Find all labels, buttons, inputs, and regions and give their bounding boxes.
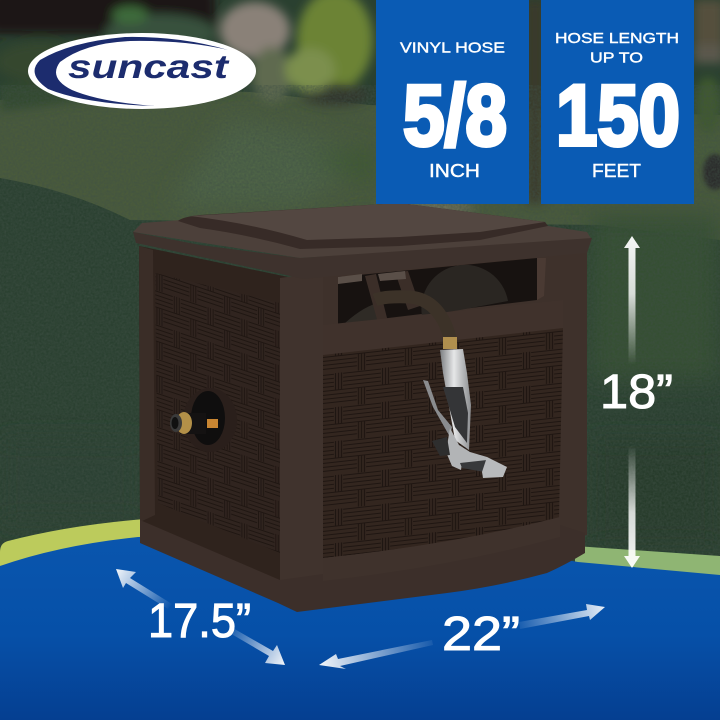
lid raised plate top [190,203,545,240]
number: 5/8: 5/8 [403,68,507,164]
side water fitting [170,388,237,452]
head [482,457,507,478]
lever [446,428,487,470]
arrow: height down [624,445,640,568]
label: hose length: HOSE LENGTH [555,30,679,47]
arrow: height up [624,236,640,365]
lower dark grip [460,460,487,472]
dimension: height 18 inches: 18” [600,366,673,419]
dimension: width 22 inches: 22” [442,608,520,661]
product: hose reel box [133,203,592,612]
arrow: width right [519,604,605,629]
lid rim [133,203,592,258]
logo wordmark: suncast [68,48,231,85]
knob [432,437,450,456]
blue floor [0,530,720,720]
logo: suncast [28,33,256,109]
silver barrel [440,349,471,450]
hose [375,297,450,338]
upper bright lawn [0,88,720,240]
dimension: depth 17.5 inches: 17.5” [148,595,251,648]
front wicker panel [323,328,563,558]
box left corner strip [139,246,155,522]
lid raised plate edge [178,203,548,249]
spray nozzle [423,337,507,478]
logo swoosh [35,37,228,106]
label: up to: UP TO [590,50,643,66]
dark grip [443,387,468,443]
unit: inch: INCH [429,161,480,181]
grass grain [0,85,720,565]
label: vinyl hose: VINYL HOSE [400,40,505,56]
lid front edge [133,232,592,279]
number: 150: 150 [556,68,680,164]
arrow: width left [319,640,433,669]
trigger [423,380,452,437]
lower front trim [323,517,560,581]
front body [322,246,587,585]
reel window opening [338,258,546,324]
brass collar [443,337,457,349]
front pillar [280,272,323,586]
arrow: depth down-right [228,627,285,665]
panel: hose length [541,0,694,204]
unit: feet: FEET [592,161,641,181]
front band [323,300,563,355]
panel: vinyl hose size [376,0,529,204]
box left side [139,246,293,582]
left wicker panel [155,273,280,553]
base [140,520,585,612]
rock [703,154,720,190]
arrow: depth up-left [116,569,172,609]
green curved floor accents [0,519,720,578]
